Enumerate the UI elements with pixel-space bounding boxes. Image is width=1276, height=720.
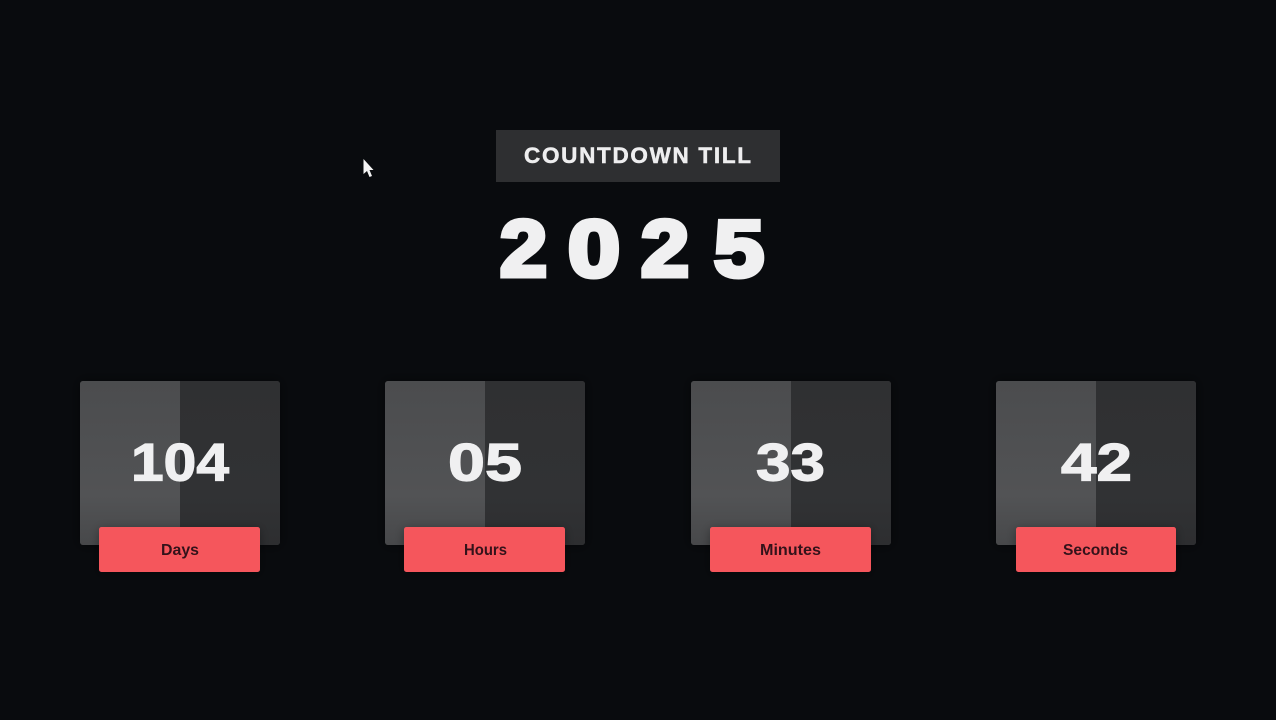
panel: days <box>80 381 280 572</box>
panel: minutes <box>691 381 891 572</box>
seconds value: 42 <box>1061 434 1132 492</box>
days value: 104 <box>131 434 230 492</box>
title: year 2025: 5 <box>714 204 764 293</box>
minutes value: 33 <box>756 434 825 492</box>
heading: countdown till <box>496 130 780 182</box>
panel: seconds <box>996 381 1196 572</box>
hours label: Hours <box>464 542 507 559</box>
seconds label <box>1016 527 1176 572</box>
hours value: 05 <box>448 434 522 492</box>
title: year 2025: 2 <box>641 204 689 293</box>
title: year 2025 <box>500 204 764 293</box>
icon: mouse cursor <box>364 159 374 177</box>
heading: countdown till: COUNTDOWN TILL <box>524 143 751 168</box>
title: year 2025: 0 <box>568 204 620 293</box>
minutes label <box>710 527 871 572</box>
minutes label: Minutes <box>760 542 821 559</box>
days label: Days <box>161 542 199 559</box>
seconds label: Seconds <box>1063 542 1128 559</box>
days label <box>99 527 260 572</box>
hours label <box>404 527 565 572</box>
title: year 2025: 2 <box>500 204 547 293</box>
panel: hours <box>385 381 585 572</box>
